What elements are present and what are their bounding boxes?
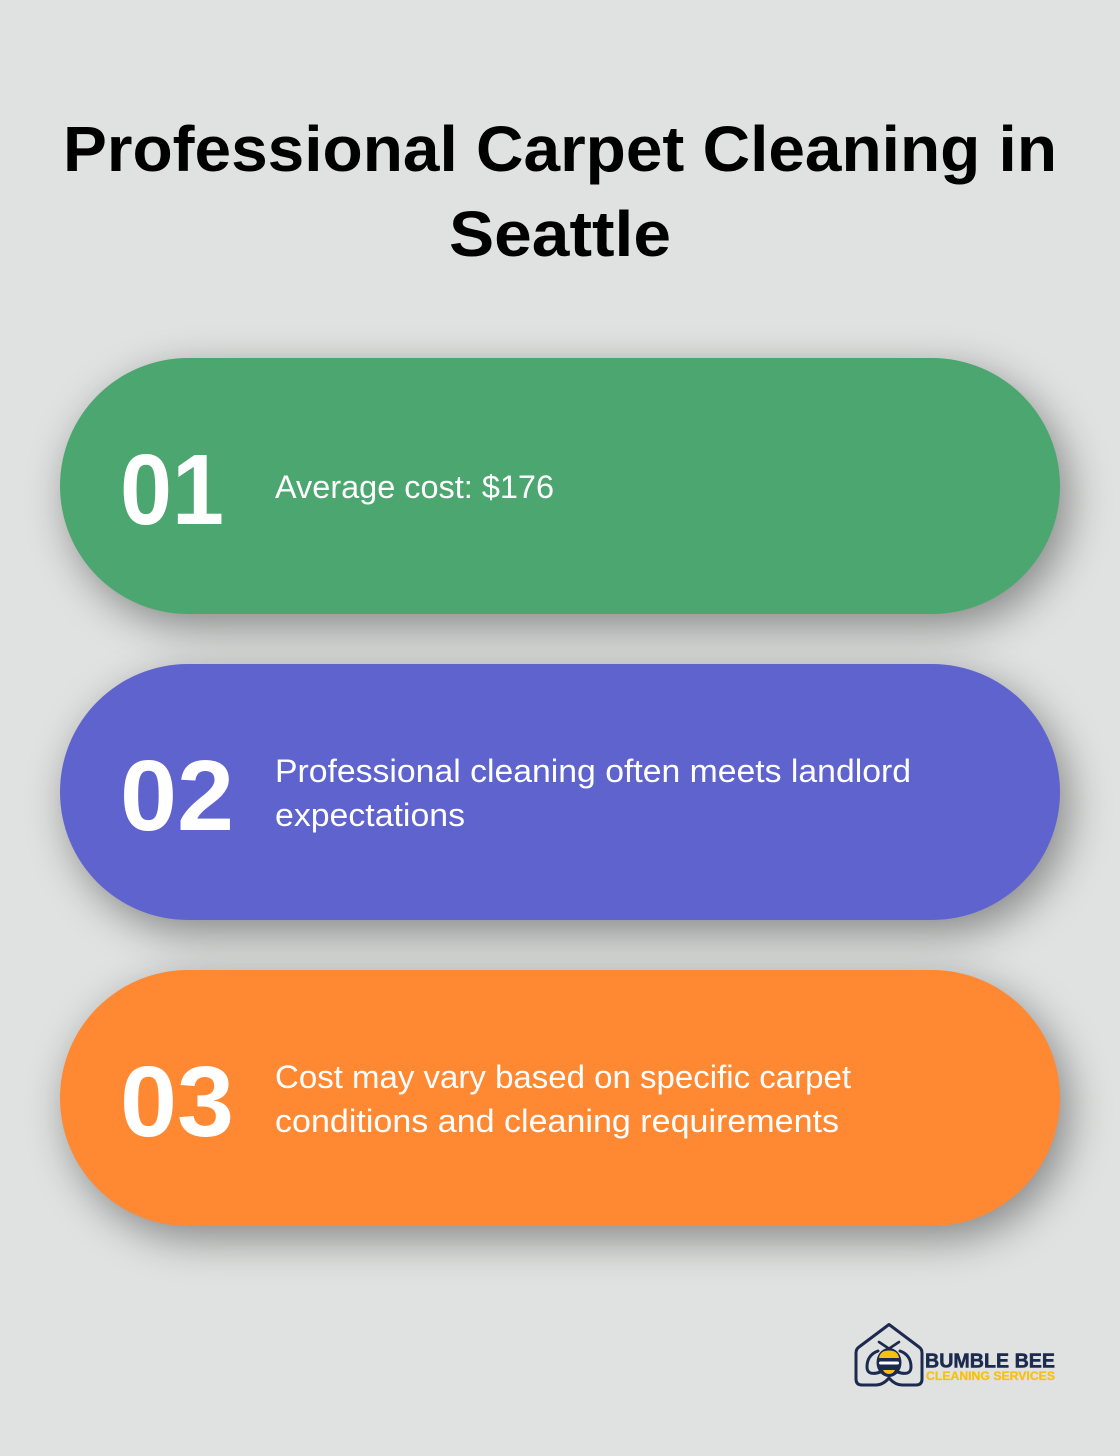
- item 2 text: [275, 753, 911, 833]
- logo wordmark: BUMBLE BEE: [925, 1350, 1055, 1372]
- title: Seattle: [449, 198, 671, 270]
- item 3 text: [275, 1059, 851, 1139]
- icon: house outline: [856, 1324, 922, 1385]
- title: Professional Carpet Cleaning in: [63, 113, 1057, 185]
- item 1 number: 01: [120, 434, 224, 546]
- item 2 number: 02: [120, 740, 234, 852]
- panel: item 2 background: [60, 664, 1060, 920]
- item 1 text: Average cost: $176: [275, 469, 554, 505]
- panel: item 1 background: [60, 358, 1060, 614]
- panel: item 3 background: [60, 970, 1060, 1226]
- item 3 number: 03: [120, 1046, 234, 1158]
- item 2 text: Professional cleaning often meets landlord: [275, 753, 911, 789]
- logo: Bumble Bee Cleaning Services: [856, 1324, 1055, 1385]
- title: [63, 113, 1057, 270]
- icon: bee: [867, 1342, 911, 1377]
- item 3 text: Cost may vary based on specific carpet: [275, 1059, 851, 1095]
- item 3 text: conditions and cleaning requirements: [275, 1103, 839, 1139]
- item 2 text: expectations: [275, 797, 465, 833]
- logo tagline: CLEANING SERVICES: [926, 1369, 1055, 1383]
